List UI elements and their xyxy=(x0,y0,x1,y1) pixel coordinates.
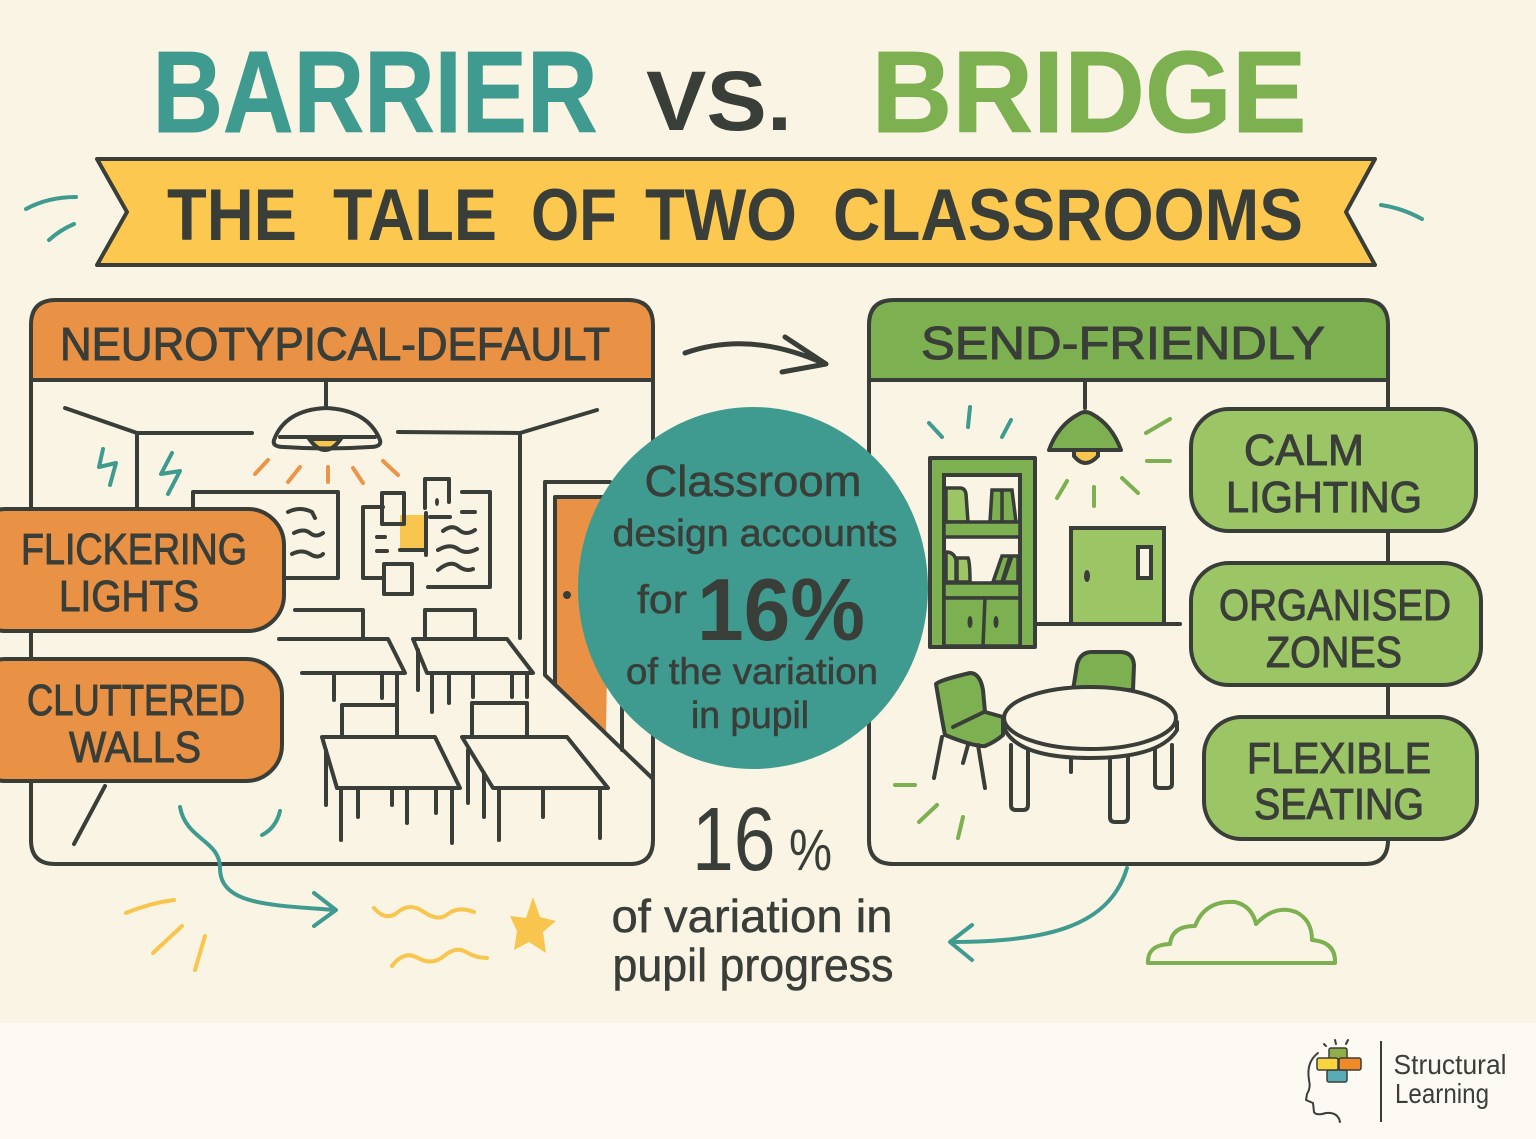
central teal circle callout: for xyxy=(637,578,687,622)
label: organised zones: ORGANISED xyxy=(1219,581,1451,630)
title xyxy=(152,27,1306,157)
banner: the tale of two classrooms: OF xyxy=(531,175,617,256)
statistic: 16% of variation in pupil progress: 16 % xyxy=(692,790,832,890)
label: flexible seating xyxy=(1204,717,1477,839)
banner: the tale of two classrooms: TALE xyxy=(333,175,497,256)
label: cluttered walls: CLUTTERED xyxy=(27,676,245,725)
label: calm lighting: CALM xyxy=(1244,426,1364,475)
panel: neurotypical-default xyxy=(31,300,653,864)
label: cluttered walls: WALLS xyxy=(69,723,201,772)
label: calm lighting xyxy=(1191,409,1476,531)
panel heading: neurotypical-default: NEUROTYPICAL-DEFAULT xyxy=(60,318,610,370)
label: flickering lights: LIGHTS xyxy=(59,572,199,621)
label: flexible seating: SEATING xyxy=(1254,780,1424,829)
classroom illustration: barrier xyxy=(65,382,652,926)
central teal circle callout: Classroom xyxy=(644,457,862,506)
arrow: curved return arrow xyxy=(950,868,1127,960)
banner: the tale of two classrooms: CLASSROOMS xyxy=(833,175,1303,256)
central teal circle callout: design accounts xyxy=(612,513,898,555)
logo icon: head and blocks xyxy=(1306,1040,1361,1122)
label: flexible seating: FLEXIBLE xyxy=(1247,734,1431,783)
central teal circle callout xyxy=(578,407,928,769)
label: calm lighting: LIGHTING xyxy=(1226,473,1422,522)
decorative banner accents xyxy=(26,197,1422,240)
bookshelf xyxy=(930,458,1035,647)
statistic: 16% of variation in pupil progress xyxy=(612,790,894,991)
banner: the tale of two classrooms: THE xyxy=(167,175,297,256)
label: organised zones: ZONES xyxy=(1266,628,1402,677)
title: BARRIER xyxy=(152,27,598,157)
statistic: 16% of variation in pupil progress: pupil progress xyxy=(612,939,894,991)
classroom illustration: bridge xyxy=(895,382,1388,838)
statistic: 16% of variation in pupil progress: of variation in xyxy=(612,890,892,942)
logo: Structural Learning: Learning xyxy=(1395,1078,1489,1109)
banner: the tale of two classrooms: TWO xyxy=(645,175,797,256)
label: cluttered walls xyxy=(0,659,282,781)
central teal circle callout: in pupil xyxy=(691,695,809,737)
logo: Structural Learning: Structural xyxy=(1394,1049,1506,1080)
arrow: between panels xyxy=(685,337,826,372)
banner: the tale of two classrooms xyxy=(97,159,1375,265)
label: flickering lights: FLICKERING xyxy=(21,525,247,574)
decorative doodles: yellow lines, squiggles and star xyxy=(126,897,556,970)
logo: Structural Learning xyxy=(1306,1040,1506,1122)
title: VS. xyxy=(646,54,792,148)
panel heading: send-friendly: SEND-FRIENDLY xyxy=(921,317,1325,369)
panel: send-friendly xyxy=(869,300,1388,864)
title: BRIDGE xyxy=(872,27,1306,157)
label: flickering lights xyxy=(0,509,284,631)
central teal circle callout: 16% xyxy=(697,560,865,659)
icon: cloud xyxy=(1148,902,1335,963)
label: organised zones xyxy=(1191,563,1481,685)
central teal circle callout: of the variation xyxy=(626,651,878,692)
